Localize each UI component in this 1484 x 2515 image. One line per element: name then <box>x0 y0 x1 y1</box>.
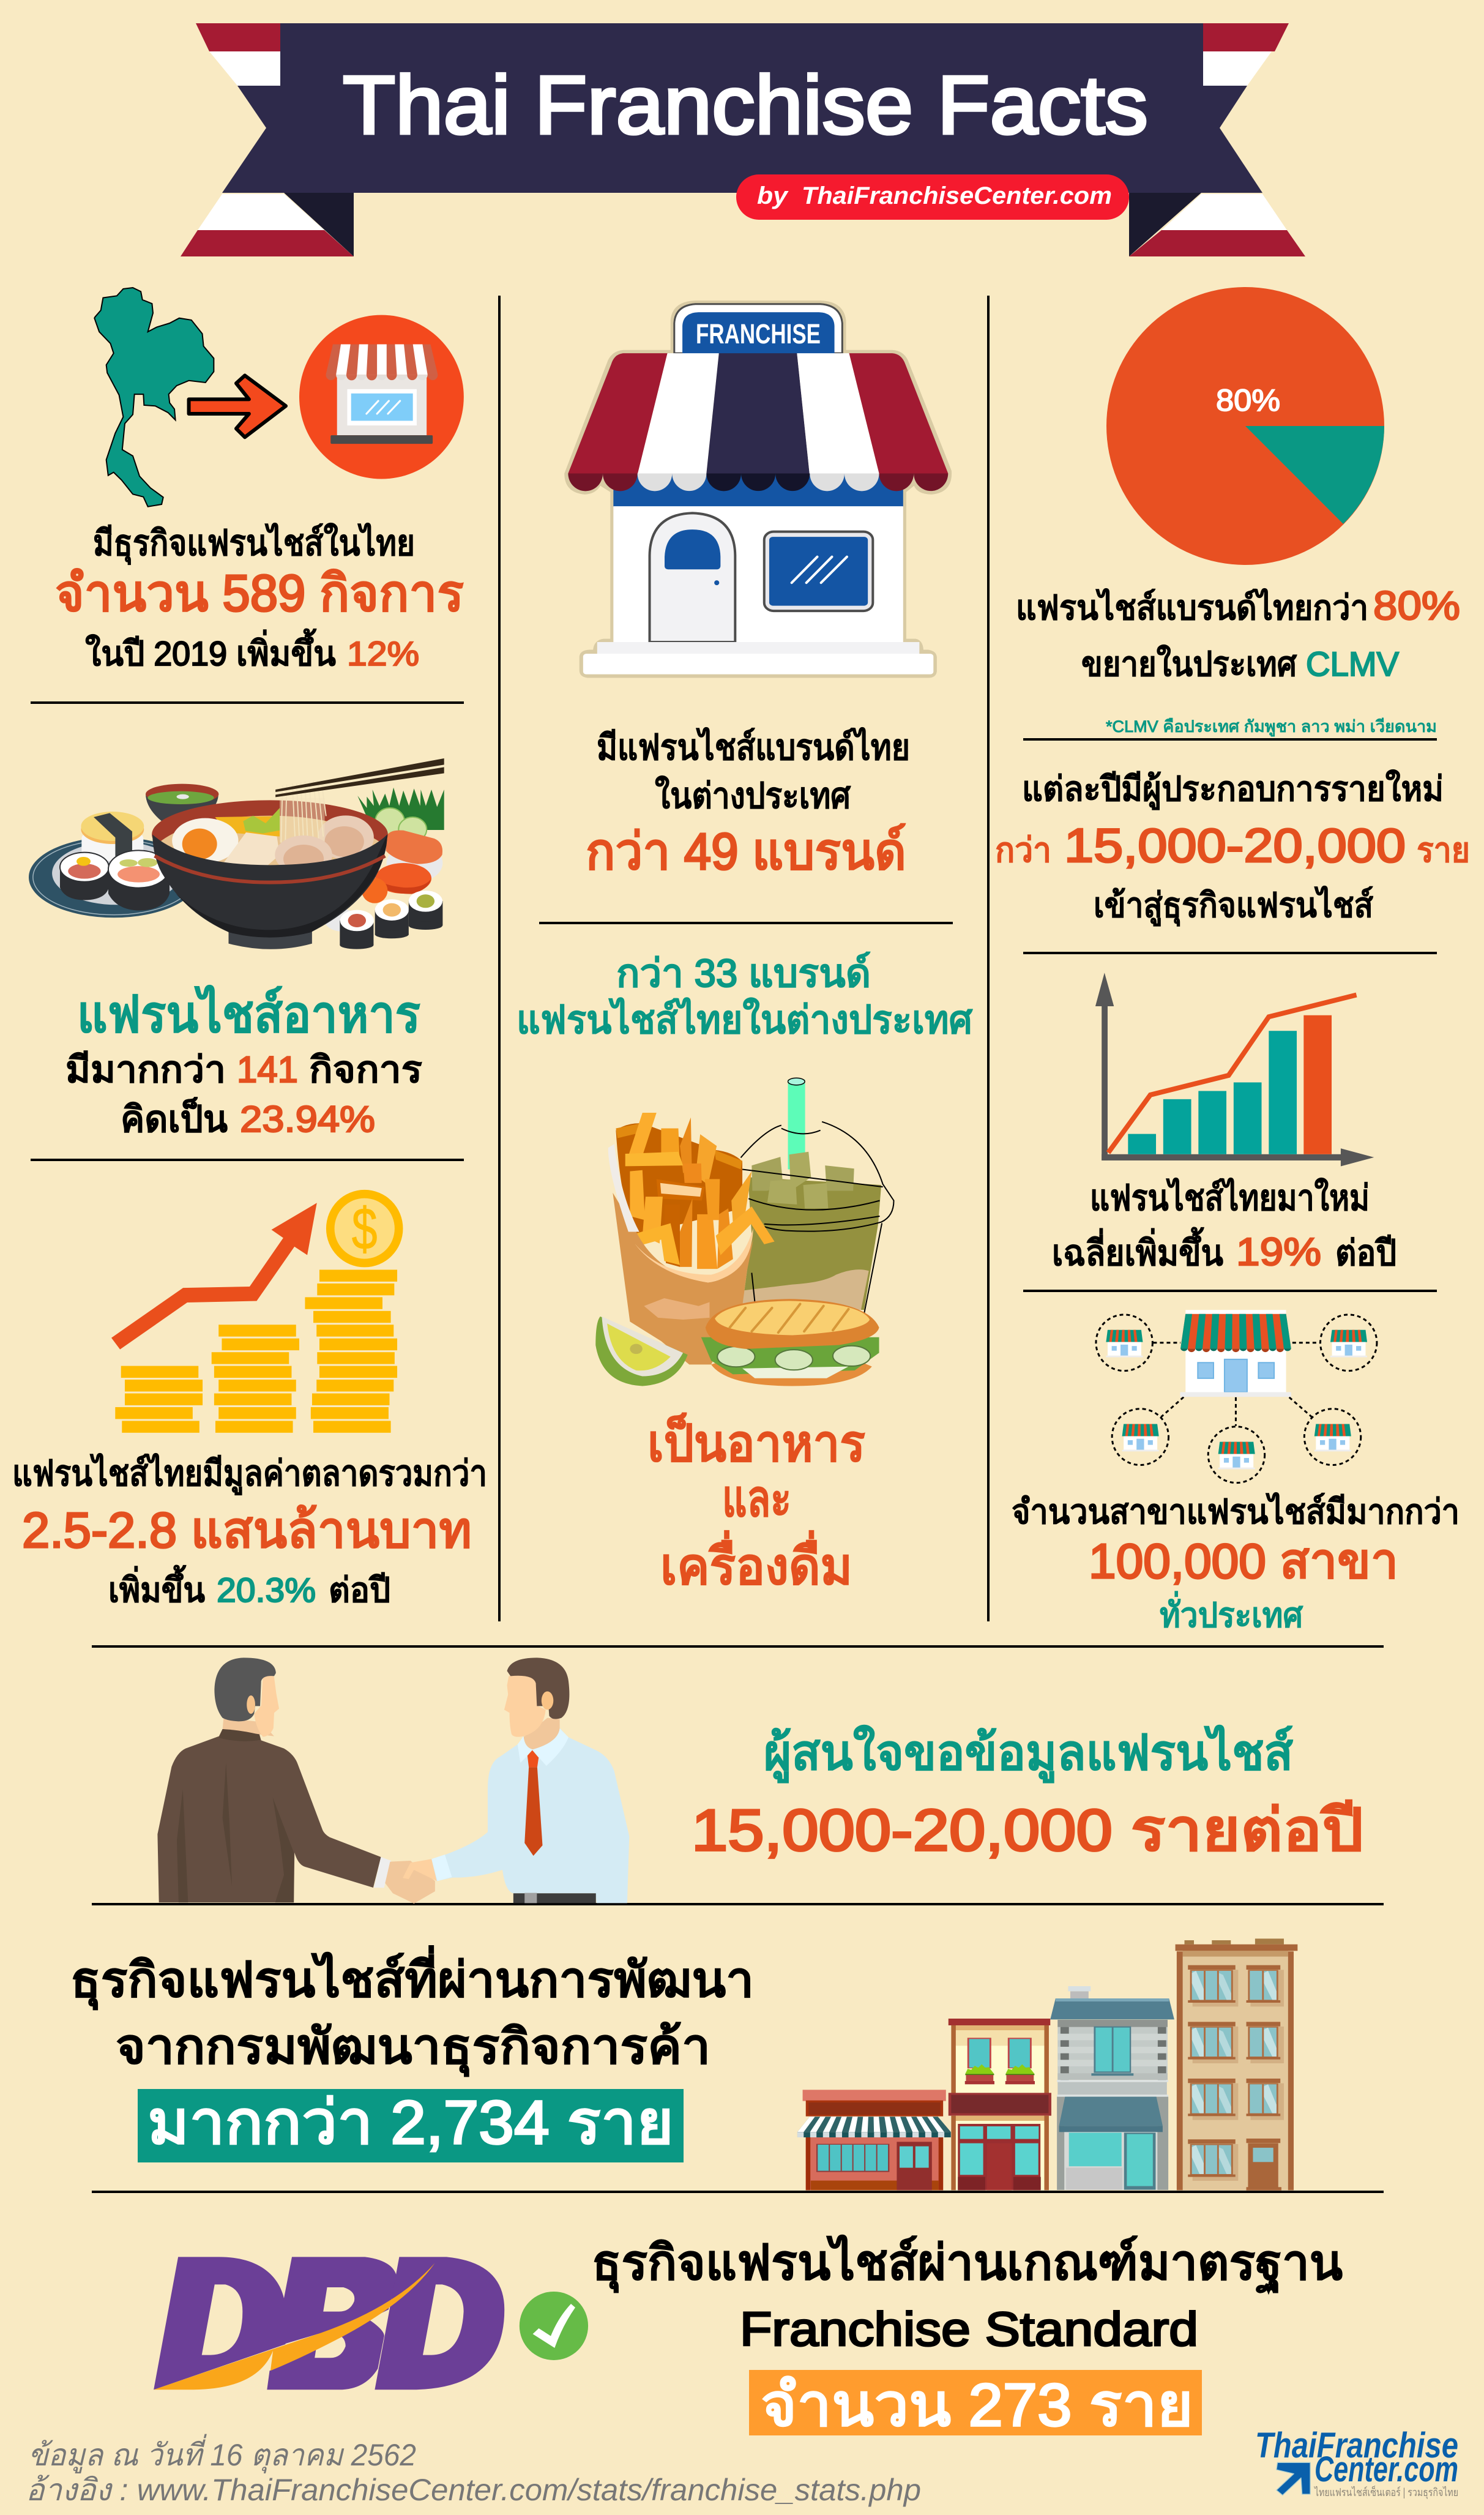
text block: developed businesses: จากกรมพัฒนาธุรกิจการค้า <box>116 2019 710 2076</box>
footnote: *CLMV คือประเทศ กัมพูชา ลาว พม่า เวียดนาม <box>1106 717 1437 736</box>
main bowl <box>152 780 388 949</box>
text block: 80 percent CLMV: CLMV <box>1306 645 1400 683</box>
sushi roll left <box>60 853 109 900</box>
text block: 80 percent CLMV: แฟรนไชส์แบรนด์ไทยกว่า <box>1016 588 1368 627</box>
text block: 33 brands: กว่า 33 แบรนด์ <box>616 951 871 995</box>
right man <box>431 1657 629 1903</box>
source footer <box>26 2434 921 2507</box>
text block: 19 percent: เฉลี่ยเพิ่มขึ้น <box>1052 1228 1223 1273</box>
text block: 589 businesses: มีธุรกิจแฟรนไชส์ในไทย <box>93 523 415 565</box>
egg sushi <box>81 812 144 861</box>
icon: franchise storefront <box>564 301 952 678</box>
orange highlight: จำนวน 273 ราย <box>761 2371 1193 2438</box>
drink cup <box>741 1078 894 1314</box>
text block: new operators: 15,000-20,000 <box>1064 818 1406 872</box>
text block: 19 percent: 19% <box>1236 1230 1321 1274</box>
text block: market value <box>12 1453 487 1609</box>
text block: food and drink: เป็นอาหาร <box>647 1413 865 1472</box>
text block: interested people: ผู้สนใจขอข้อมูลแฟรนไชส์ <box>764 1725 1293 1782</box>
text block: 49 brands abroad <box>586 727 910 880</box>
branch store lower left <box>1112 1409 1169 1465</box>
branch store bottom <box>1208 1427 1265 1483</box>
branch store lower right <box>1304 1409 1361 1465</box>
coin <box>326 1190 403 1267</box>
text block: market value: 2.5-2.8 แสนล้านบาท <box>22 1503 472 1558</box>
check mark <box>520 2292 588 2360</box>
chopsticks <box>275 758 444 797</box>
coin: $ <box>352 1195 378 1261</box>
pie chart 80% <box>1106 287 1384 565</box>
text block: 100,000 branches: จำนวนสาขาแฟรนไชส์มีมากกว่า <box>1012 1492 1460 1531</box>
coin stack tall <box>305 1269 397 1433</box>
column dividers <box>31 296 1437 2193</box>
icon: branch network <box>1096 1310 1377 1483</box>
coin stack short <box>115 1366 203 1433</box>
source footer: ข้อมูล ณ วันที่ 16 ตุลาคม 2562 <box>28 2434 416 2474</box>
text block: 19 percent <box>1052 1178 1396 1274</box>
fries box <box>608 1113 775 1364</box>
text block: new operators: เข้าสู่ธุรกิจแฟรนไชส์ <box>1094 886 1373 926</box>
text block: food and drink: และ <box>722 1470 791 1527</box>
salmon sushi right <box>325 830 442 932</box>
text block: 80 percent CLMV: 80% <box>1373 583 1460 628</box>
byline pill <box>736 174 1129 220</box>
pie chart 80%: 80% <box>1216 383 1280 417</box>
arrow up <box>111 1203 317 1350</box>
text block: franchise standard: Franchise Standard <box>740 2302 1198 2356</box>
icon: row of buildings <box>797 1938 1297 2191</box>
icon: arrow <box>189 375 286 437</box>
branch store top left <box>1096 1315 1152 1371</box>
sandwich <box>701 1299 879 1386</box>
icon: Thailand map <box>94 288 214 507</box>
text block: 33 brands <box>516 951 972 1042</box>
text block: food franchise: 23.94% <box>240 1099 375 1140</box>
text block: interested people <box>692 1725 1363 1863</box>
text block: franchise standard <box>592 2235 1343 2438</box>
sign text: FRANCHISE <box>696 318 821 349</box>
byline pill: by <box>757 182 789 209</box>
logo arrow <box>1277 2462 1310 2495</box>
text block: franchise standard: ธุรกิจแฟรนไชส์ผ่านเกณฑ์มาตรฐาน <box>592 2235 1343 2292</box>
left man <box>157 1657 391 1902</box>
door <box>650 513 735 642</box>
text block: 589 businesses: 12% <box>347 634 419 673</box>
bar chart <box>1095 973 1374 1167</box>
text block: food and drink <box>647 1413 865 1595</box>
text block: 589 businesses: จำนวน 589 กิจการ <box>55 564 464 622</box>
cream shop <box>949 2019 1051 2190</box>
text block: 100,000 branches: ทั่วประเทศ <box>1160 1591 1303 1634</box>
lime <box>595 1317 688 1386</box>
text block: 33 brands: แฟรนไชส์ไทยในต่างประเทศ <box>516 998 972 1042</box>
text block: 19 percent: แฟรนไชส์ไทยมาใหม่ <box>1090 1178 1370 1218</box>
red shop <box>797 2090 951 2190</box>
stone shop <box>1050 1986 1174 2190</box>
text block: new operators: กว่า <box>995 831 1051 869</box>
text block: food franchise <box>65 985 422 1140</box>
steps <box>583 642 933 675</box>
icon: store in circle <box>299 315 464 479</box>
text block: food and drink: เครื่องดื่ม <box>660 1531 852 1595</box>
text block: 49 brands abroad: ในต่างประเทศ <box>655 775 851 816</box>
text block: market value: เพิ่มขึ้น <box>108 1566 205 1609</box>
source footer: อ้างอิง : www.ThaiFranchiseCenter.com/stats/franchise_stats.php <box>26 2473 921 2507</box>
grass and cucumber <box>357 788 444 842</box>
text block: 80 percent CLMV: ขยายในประเทศ <box>1081 645 1297 683</box>
text block: new operators: ราย <box>1417 831 1470 869</box>
text block: 80 percent CLMV <box>1016 583 1460 736</box>
icon: Thailand map to store <box>94 288 464 507</box>
main store <box>1180 1310 1291 1397</box>
icon: handshake <box>157 1657 629 1904</box>
text block: 49 brands abroad: มีแฟรนไชส์แบรนด์ไทย <box>597 727 910 768</box>
sushi roll salmon <box>108 850 170 911</box>
text block: new operators <box>995 769 1470 926</box>
text block: 100,000 branches: 100,000 สาขา <box>1089 1534 1398 1588</box>
text block: interested people: 15,000-20,000 รายต่อปี <box>692 1798 1363 1863</box>
text block: 589 businesses: ในปี 2019 เพิ่มขึ้น <box>85 629 336 673</box>
brick apartment <box>1176 1938 1297 2191</box>
clasped hands <box>385 1859 437 1904</box>
text block: 49 brands abroad: กว่า 49 แบรนด์ <box>586 823 906 880</box>
title: Thai Franchise Facts <box>343 59 1148 151</box>
text block: new operators: แต่ละปีมีผู้ประกอบการรายใหม่ <box>1022 769 1444 810</box>
logo: ThaiFranchiseCenter <box>1255 2426 1458 2499</box>
text block: food franchise: 141 <box>237 1049 298 1090</box>
banner <box>181 23 1305 256</box>
icon: coin stacks and arrow <box>111 1190 403 1433</box>
branch store top right <box>1321 1315 1377 1371</box>
text block: food franchise: มีมากกว่า <box>65 1049 226 1090</box>
text block: 19 percent: ต่อปี <box>1335 1233 1396 1273</box>
window <box>764 532 873 611</box>
text block: food franchise: กิจการ <box>309 1049 422 1090</box>
text block: food franchise: คิดเป็น <box>121 1097 228 1140</box>
logo: DBD <box>154 2257 588 2390</box>
text block: market value: แฟรนไชส์ไทยมีมูลค่าตลาดรวมกว่า <box>12 1453 487 1495</box>
text block: market value: 20.3% <box>217 1571 316 1609</box>
text block: 589 businesses <box>55 523 464 673</box>
text block: market value: ต่อปี <box>329 1571 390 1609</box>
icon: fries, drink, sandwich <box>595 1078 894 1386</box>
small rolls <box>340 891 442 949</box>
byline pill: ThaiFranchiseCenter.com <box>802 182 1112 209</box>
icon: ramen and sushi <box>29 758 444 949</box>
text block: food franchise: แฟรนไชส์อาหาร <box>77 985 420 1043</box>
coin stack mid <box>212 1325 299 1433</box>
text block: developed businesses <box>70 1946 754 2162</box>
green highlight: มากกว่า 2,734 ราย <box>147 2088 674 2157</box>
soup bowl <box>146 784 218 821</box>
text block: 100,000 branches <box>1012 1492 1460 1634</box>
text block: developed businesses: ธุรกิจแฟรนไชส์ที่ผ่านการพัฒนา <box>70 1946 754 2009</box>
plate <box>29 837 199 917</box>
